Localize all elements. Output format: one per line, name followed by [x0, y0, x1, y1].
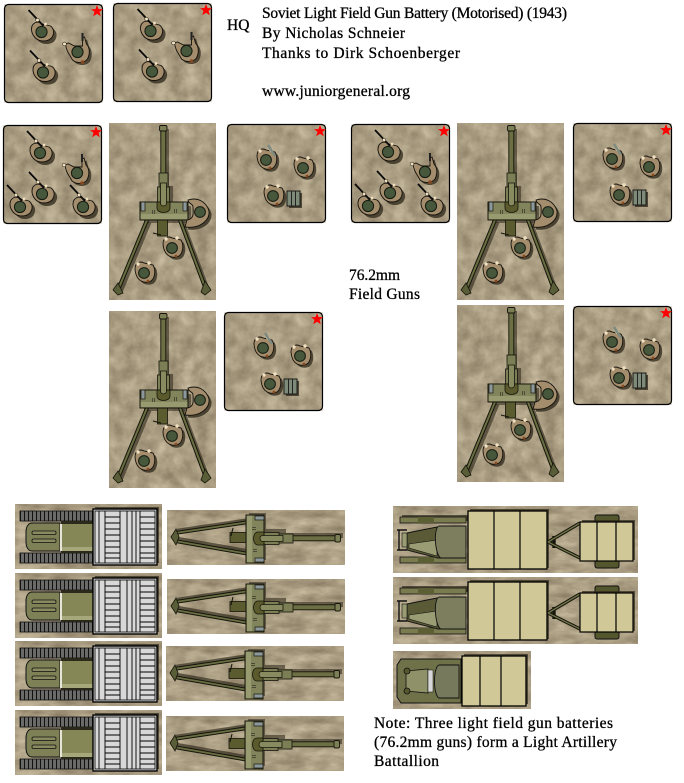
small truck: [393, 651, 531, 709]
title and credits: By Nicholas Schneier: [262, 25, 406, 42]
right section: gun crew counter 1: [574, 124, 672, 222]
towed gun 2: [167, 579, 345, 634]
left section: gun crew counter 2: [224, 312, 323, 410]
left section: field gun 1: [109, 123, 216, 300]
towed gun 4: [166, 716, 344, 771]
title and credits: Soviet Light Field Gun Battery (Motorised) (1943): [262, 5, 567, 22]
note text: Battallion: [374, 753, 439, 770]
right section: gun crew counter 2: [574, 306, 672, 404]
label: 76.2mm field guns: Field Guns: [349, 286, 420, 303]
truck with trailer 2: [393, 577, 638, 644]
label: 76.2mm field guns: 76.2mm: [349, 267, 400, 284]
tractor 3: [15, 641, 162, 706]
right section: field gun 1: [457, 123, 564, 300]
tractor 1: [15, 504, 162, 569]
truck with trailer 1: [393, 506, 638, 573]
note text: [374, 715, 617, 770]
tractor 4: [15, 710, 162, 775]
note text: (76.2mm guns) form a Light Artillery: [374, 734, 617, 751]
left section: field gun 2: [109, 311, 216, 488]
title and credits: www.juniorgeneral.org: [262, 83, 410, 100]
towed gun 1: [167, 510, 345, 565]
hq counter 2: [114, 4, 212, 102]
title and credits: Thanks to Dirk Schoenberger: [262, 45, 461, 62]
note text: Note: Three light field gun batteries: [374, 715, 613, 732]
label: 76.2mm field guns: [349, 267, 420, 303]
label: HQ: HQ: [227, 17, 249, 34]
left section: infantry counter: [4, 126, 102, 224]
title and credits: [262, 5, 567, 100]
towed gun 3: [166, 646, 344, 701]
right section: infantry counter: [352, 124, 450, 222]
tractor 2: [15, 573, 162, 638]
hq counter 1: [4, 4, 103, 102]
left section: gun crew counter 1: [228, 124, 326, 222]
right section: field gun 2: [457, 305, 564, 482]
